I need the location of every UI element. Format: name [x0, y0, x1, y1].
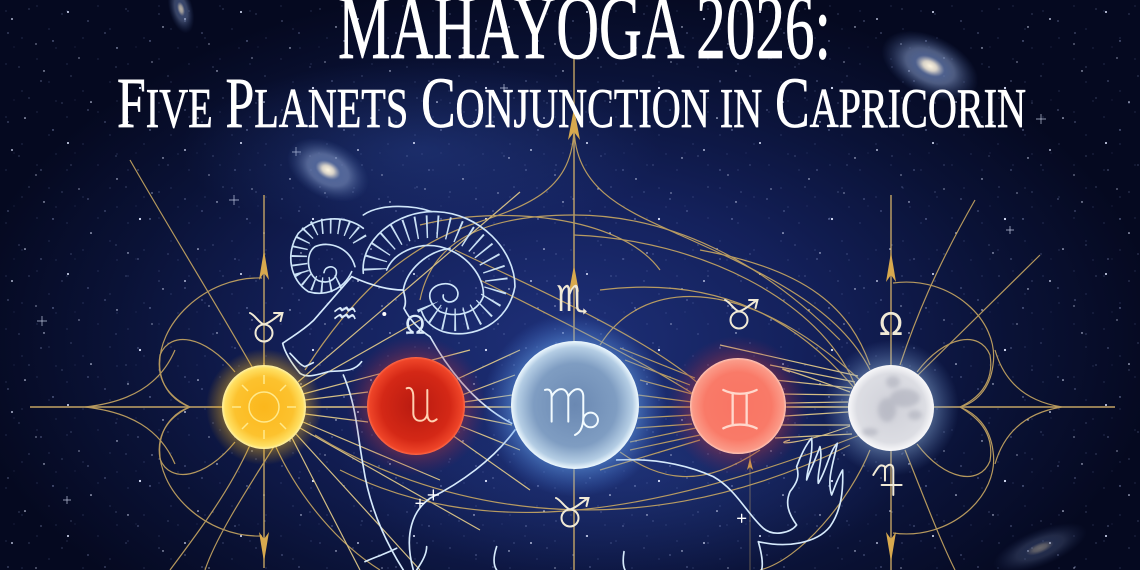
top central spire curves [305, 125, 870, 370]
symbol: Scorpio top: ♏︎ [556, 279, 588, 320]
face [283, 277, 430, 376]
Capricorn ram: tail and hand [617, 438, 843, 570]
Capricorn ram: head and horns [283, 206, 515, 570]
planet: moon [823, 340, 959, 476]
right horn [363, 206, 515, 334]
arrows on axes [259, 108, 896, 562]
icon: sun glyph [232, 375, 296, 439]
title line 2: FIVE PLANETS CONJUNCTION IN CAPRICORIN [117, 63, 1026, 143]
pink planet rays to moon [720, 345, 858, 443]
symbol: Aquarius on ram: ♒︎ [332, 297, 358, 332]
eye [382, 312, 386, 316]
red planet rays [452, 350, 530, 490]
left horn [291, 219, 363, 293]
planet: red [346, 336, 486, 476]
icon: red planet glyph [407, 388, 437, 421]
neck and body [343, 337, 515, 570]
neck star [416, 490, 438, 507]
galaxy: upper right [870, 16, 990, 116]
planet: pink [668, 336, 808, 476]
galaxy: top left [163, 0, 199, 36]
zodiac symbols [250, 279, 903, 526]
icon: horned symbol below blue planet [556, 498, 588, 526]
symbol: Leo on ram: Ω [405, 311, 425, 341]
icon: Capricorn glyph [545, 389, 598, 435]
moon craters [862, 376, 922, 436]
icon: jupiter-like symbol below moon [873, 465, 902, 495]
icon: Gemini glyph [723, 390, 757, 428]
galaxy: center left [276, 125, 380, 215]
left star flares and loops around sun [85, 160, 380, 570]
icon: horned symbol above pink planet [725, 300, 758, 328]
planet: sun [206, 349, 322, 465]
blue planet long arcs [315, 215, 860, 512]
moon loops [700, 200, 1062, 570]
planet: blue [483, 313, 667, 497]
title [117, 0, 1026, 143]
icon: horned symbol above sun [250, 313, 282, 342]
galaxy: bottom right [987, 513, 1093, 570]
sun rays to the right [292, 192, 520, 570]
symbol: Leo above moon: Ω [879, 307, 903, 343]
